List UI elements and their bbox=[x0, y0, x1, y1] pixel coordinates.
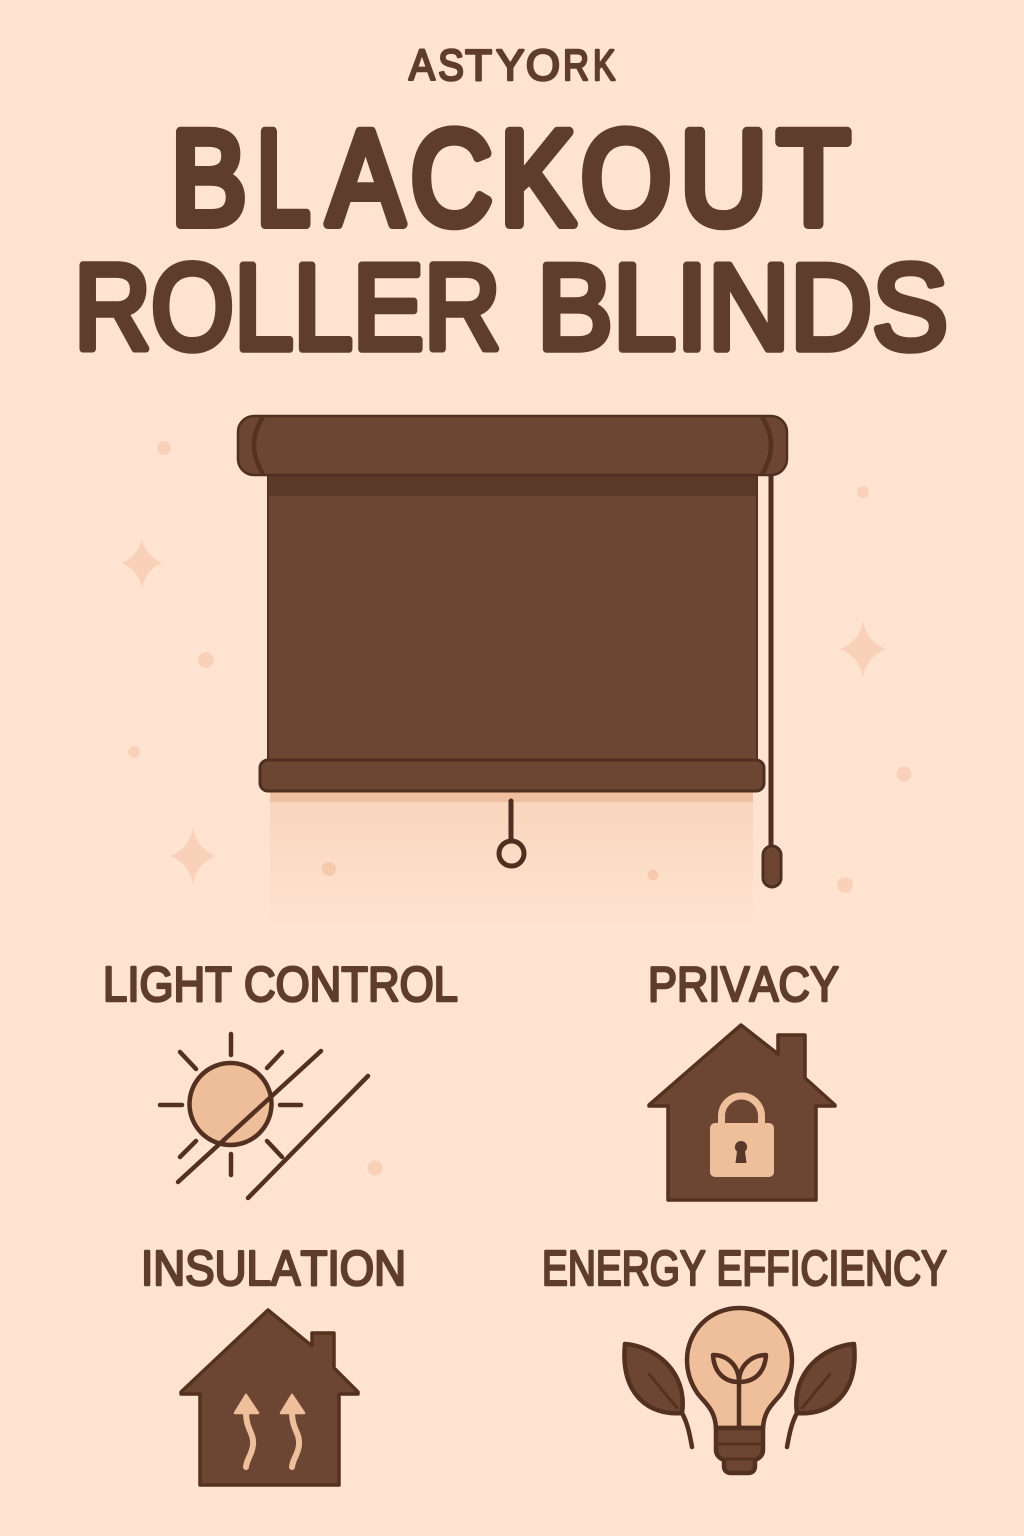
heading: LIGHT CONTROL bbox=[103, 958, 458, 1012]
title bbox=[74, 104, 948, 375]
title line 1: U bbox=[680, 104, 767, 253]
brand name: O bbox=[526, 41, 560, 90]
left leaf bbox=[624, 1344, 683, 1413]
panel: energy efficiency bbox=[542, 1242, 947, 1473]
cord weight bbox=[763, 846, 781, 887]
brand name: T bbox=[465, 41, 492, 90]
word: blinds: BLINDS bbox=[537, 239, 948, 375]
heading: PRIVACY bbox=[648, 958, 839, 1012]
bulb base bbox=[716, 1428, 763, 1473]
bottom bar bbox=[260, 760, 764, 791]
brand name: S bbox=[438, 41, 464, 90]
sprout bbox=[737, 1382, 741, 1428]
light glow under blind bbox=[270, 791, 753, 926]
right leaf bbox=[796, 1344, 855, 1413]
title line 2 bbox=[74, 239, 948, 375]
title line 1: L bbox=[256, 104, 310, 253]
panel: privacy bbox=[648, 958, 839, 1200]
icon: house with padlock bbox=[649, 1025, 835, 1200]
brand name: Y bbox=[496, 41, 524, 90]
fabric shadow band bbox=[269, 475, 756, 496]
brand name: R bbox=[563, 41, 589, 90]
title line 1: B bbox=[171, 104, 247, 253]
title line 1: T bbox=[777, 104, 850, 253]
pull cord bbox=[768, 470, 774, 850]
background dots and sparkles bbox=[122, 441, 912, 1176]
panel: insulation bbox=[141, 1242, 406, 1485]
title line 1: O bbox=[581, 104, 671, 253]
pull ring bbox=[499, 801, 524, 866]
shadow strip below bar bbox=[270, 791, 753, 802]
title line 1: K bbox=[500, 104, 575, 253]
icon: house with rising heat arrows bbox=[181, 1310, 358, 1485]
title line 1: C bbox=[411, 104, 492, 253]
blind fabric bbox=[268, 470, 757, 765]
roller blind illustration bbox=[238, 416, 787, 926]
word: roller: ROLLER bbox=[74, 239, 501, 375]
brand name: K bbox=[593, 41, 615, 90]
roller end caps bbox=[254, 417, 771, 474]
title line 1: A bbox=[327, 104, 404, 253]
bulb glass bbox=[687, 1308, 792, 1428]
heading: INSULATION bbox=[141, 1242, 406, 1296]
brand name: A bbox=[409, 41, 436, 90]
icon: light bulb with leaves bbox=[624, 1308, 855, 1473]
roller tube bbox=[238, 416, 787, 475]
icon: sun with diagonal lines bbox=[160, 1034, 368, 1198]
dots in glow bbox=[322, 862, 658, 880]
panel: light control bbox=[103, 958, 458, 1198]
